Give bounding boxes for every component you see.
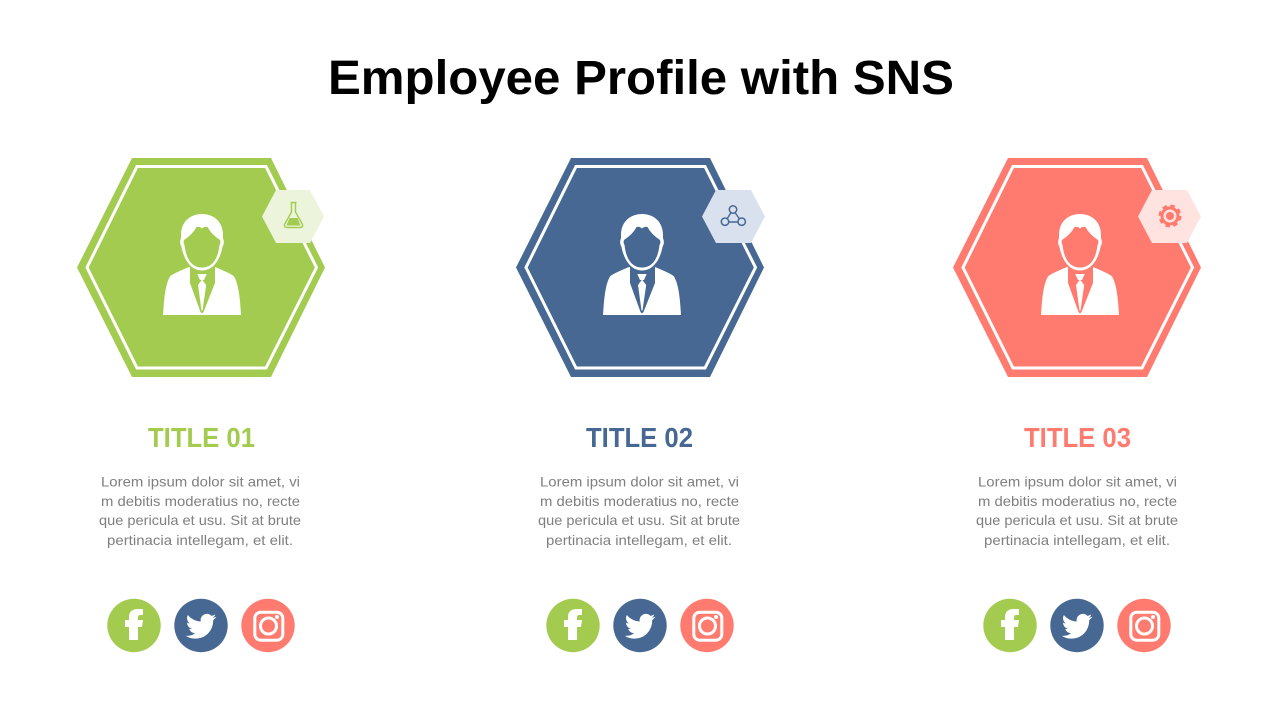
icon: instagram — [1117, 599, 1171, 652]
text block — [99, 474, 301, 548]
panel: profile 01 — [77, 158, 325, 652]
text block: que pericula et usu. Sit at brute — [99, 512, 301, 528]
icon: person — [603, 214, 681, 315]
text block: Lorem ipsum dolor sit amet, vi — [101, 474, 300, 490]
badge: flask — [262, 190, 324, 243]
icon: twitter — [1050, 599, 1104, 652]
heading: TITLE 01 — [148, 422, 255, 453]
panel: profile 02 — [516, 158, 765, 652]
panel: profile 03 — [953, 158, 1201, 652]
icon: facebook — [546, 599, 600, 652]
badge: gear — [1138, 190, 1201, 243]
large hexagon: green — [77, 158, 325, 377]
icon: facebook — [107, 599, 161, 652]
text block: que pericula et usu. Sit at brute — [538, 512, 740, 528]
text block: Lorem ipsum dolor sit amet, vi — [978, 474, 1177, 490]
icon: facebook — [983, 599, 1037, 652]
text block: pertinacia intellegam, et elit. — [546, 532, 732, 548]
text block: pertinacia intellegam, et elit. — [107, 532, 293, 548]
text block — [976, 474, 1178, 548]
text block: Lorem ipsum dolor sit amet, vi — [540, 474, 739, 490]
icon: twitter — [613, 599, 667, 652]
heading: TITLE 02 — [586, 422, 693, 453]
text block: m debitis moderatius no, recte — [540, 493, 739, 509]
icon: instagram — [241, 599, 295, 652]
badge: network — [702, 190, 765, 243]
icon: twitter — [174, 599, 228, 652]
large hexagon: coral — [953, 158, 1201, 377]
text block: que pericula et usu. Sit at brute — [976, 512, 1178, 528]
icon: instagram — [680, 599, 734, 652]
title: Employee Profile with SNS — [328, 52, 954, 105]
large hexagon: blue — [516, 158, 764, 377]
text block: m debitis moderatius no, recte — [978, 493, 1177, 509]
icon: person — [1041, 214, 1119, 315]
text block: pertinacia intellegam, et elit. — [984, 532, 1170, 548]
text block — [538, 474, 740, 548]
text block: m debitis moderatius no, recte — [101, 493, 300, 509]
heading: TITLE 03 — [1024, 422, 1131, 453]
icon: person — [163, 214, 241, 315]
